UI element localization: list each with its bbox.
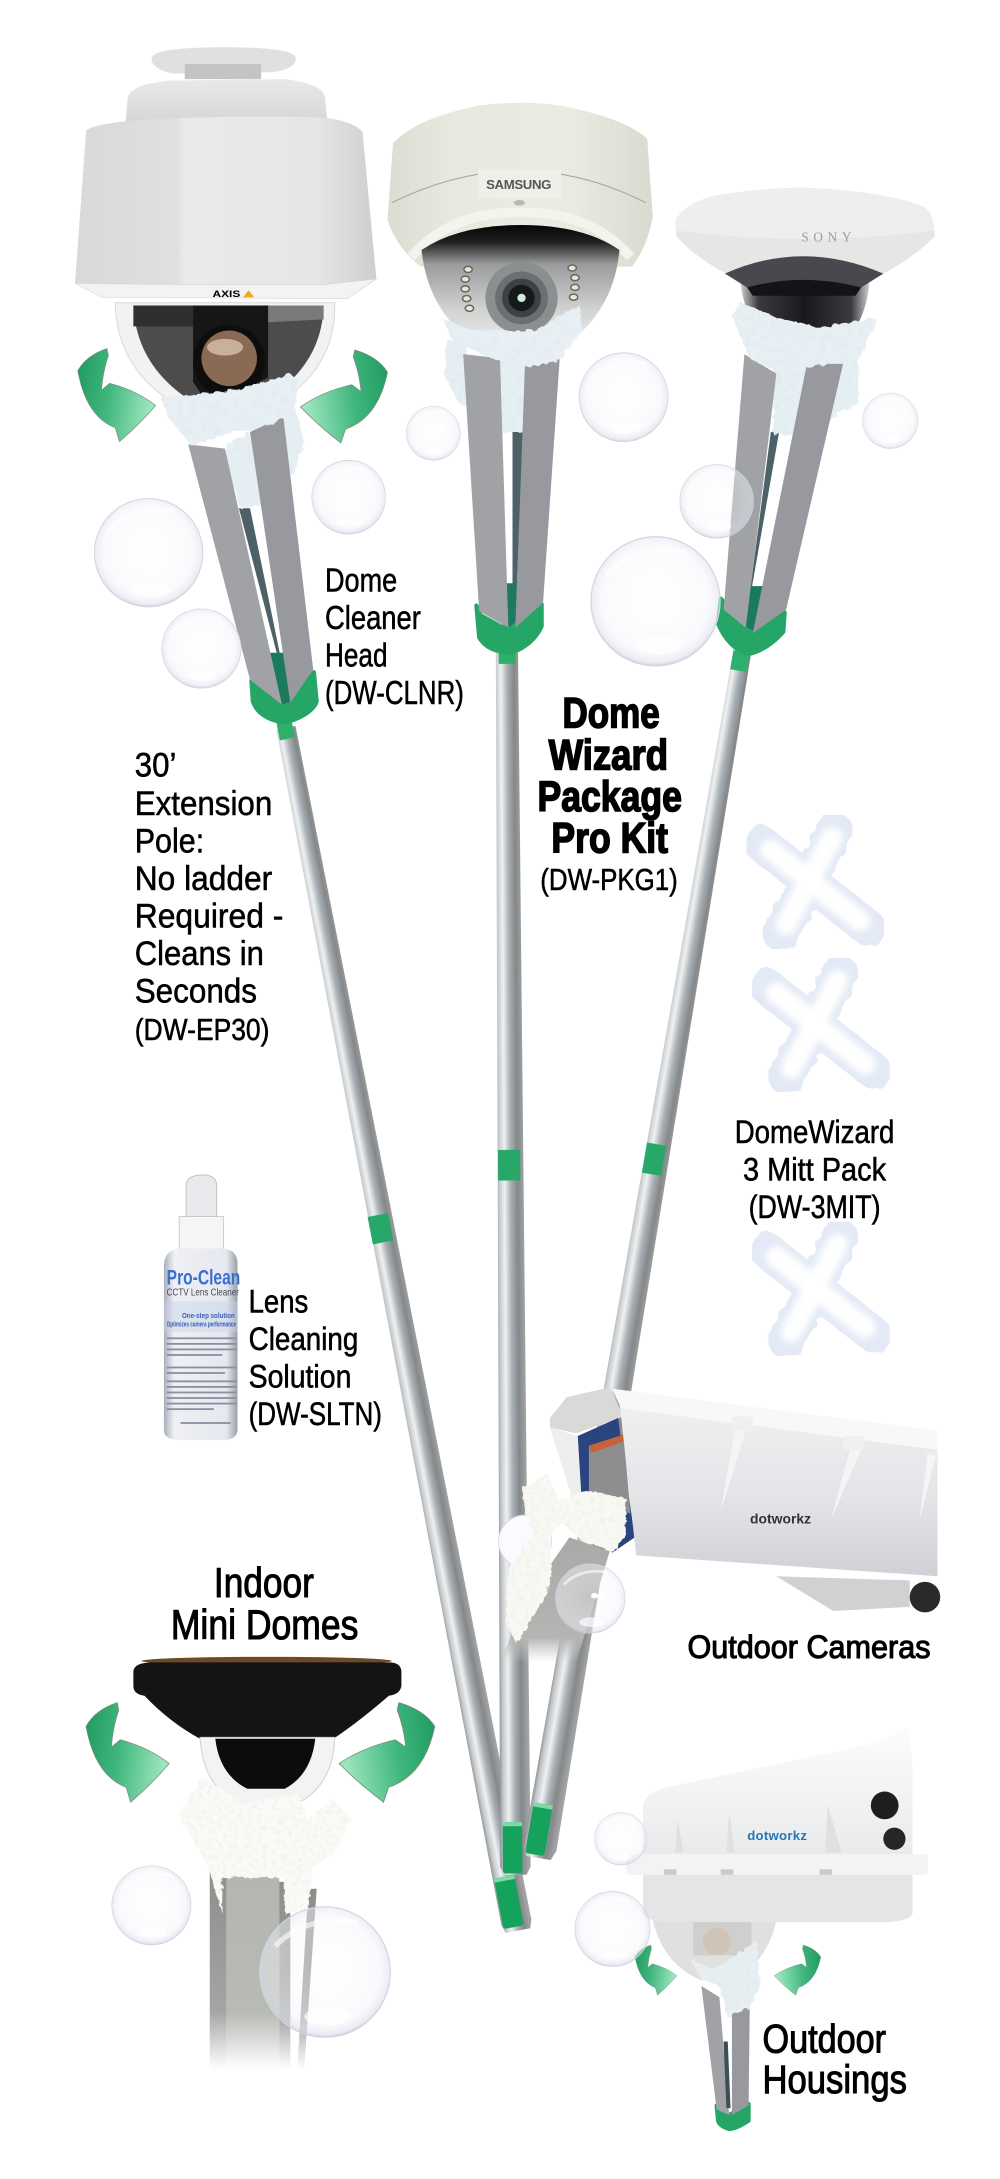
mitt band xyxy=(732,303,876,372)
collar xyxy=(476,604,542,653)
dome cleaner head 2 with mitt and collar xyxy=(442,305,582,653)
label: 30' Extension Pole: No ladder xyxy=(135,860,272,898)
collar xyxy=(718,599,785,654)
Sony dome camera xyxy=(675,187,935,331)
label: Outdoor Housings xyxy=(762,2017,907,2102)
dome cleaner head 1 with mitt and collar xyxy=(161,374,317,722)
label: Outdoor Cameras: Outdoor Cameras xyxy=(687,1629,931,1665)
AXIS logo text: AXIS xyxy=(213,289,240,299)
label: Dome Cleaner Head: (DW-CLNR) xyxy=(325,675,464,712)
lens cleaning solution bottle: Optimizes camera performance xyxy=(167,1321,236,1328)
label: DomeWizard 3 Mitt Pack: (DW-3MIT) xyxy=(749,1189,881,1225)
rotation arrow, housing left xyxy=(635,1945,677,1995)
lens cleaning solution bottle xyxy=(164,1175,240,1440)
mitt 1 xyxy=(762,830,868,933)
bottle label text: Pro-Clean xyxy=(167,1267,240,1290)
indoor mount arms and mitt xyxy=(178,1778,351,2069)
label: Lens Cleaning Solution: Solution xyxy=(249,1358,351,1394)
title: Dome Wizard Package Pro Kit: (DW-PKG1) xyxy=(540,863,678,897)
label: Lens Cleaning Solution: Cleaning xyxy=(249,1321,358,1357)
mitt xyxy=(178,1778,351,1914)
label: Dome Cleaner Head xyxy=(325,563,464,712)
label: 30' Extension Pole: Seconds xyxy=(135,973,257,1011)
label: Indoor Mini Domes: Indoor xyxy=(214,1559,314,1606)
rotation arrows, top camera left xyxy=(78,349,156,442)
extension pole 2 (center) xyxy=(492,644,531,1875)
label: Indoor Mini Domes xyxy=(171,1559,358,1648)
extension pole 3 (right) xyxy=(522,649,759,1861)
mitt band xyxy=(442,305,582,368)
label: Indoor Mini Domes: Mini Domes xyxy=(171,1601,358,1648)
mount xyxy=(776,1576,910,1611)
label: 30' Extension Pole: (DW-EP30) xyxy=(135,1013,269,1047)
mitt on outdoor camera with shadow xyxy=(500,1473,626,1662)
outdoor housing with dome xyxy=(626,1728,928,1980)
outdoor housing cleaner head xyxy=(690,1942,760,2129)
rotation arrows, top camera right xyxy=(300,350,387,443)
main enclosure xyxy=(618,1394,937,1576)
collar xyxy=(251,672,317,722)
label: Lens Cleaning Solution: Lens xyxy=(249,1283,308,1319)
mitt xyxy=(690,1942,760,2018)
bubble behind outdoor camera mitt xyxy=(499,1515,551,1568)
label: 30' Extension Pole xyxy=(135,746,283,1047)
label: 30' Extension Pole: 30’ xyxy=(135,746,176,784)
rotation arrow, mini dome left xyxy=(86,1703,169,1802)
rotation arrow, housing right xyxy=(774,1945,821,1995)
blue front frame xyxy=(578,1418,635,1553)
label: 30' Extension Pole: Pole: xyxy=(135,823,204,861)
dotworkz logo text: dotworkz xyxy=(750,1510,811,1526)
label: Lens Cleaning Solution xyxy=(249,1283,382,1432)
title: Dome Wizard Package Pro Kit xyxy=(537,690,682,897)
label: Dome Cleaner Head: Cleaner xyxy=(325,600,421,637)
dotworkz logo text: dotworkz xyxy=(747,1828,807,1843)
label: 30' Extension Pole: Cleans in xyxy=(135,935,264,973)
soap bubbles xyxy=(94,353,918,2037)
mitt 3 xyxy=(768,1237,874,1340)
indoor mini dome camera xyxy=(133,1657,401,1803)
label: Lens Cleaning Solution: (DW-SLTN) xyxy=(249,1396,382,1432)
outdoor camera housing xyxy=(550,1387,940,1612)
label: Outdoor Housings: Outdoor xyxy=(762,2017,886,2062)
lens cleaning solution bottle: CCTV Lens Cleaner xyxy=(167,1288,239,1299)
title: Dome Wizard Package Pro Kit: Dome xyxy=(562,690,660,738)
sun shield xyxy=(550,1387,624,1433)
mitt band xyxy=(161,374,299,446)
title: Dome Wizard Package Pro Kit: Package xyxy=(537,773,682,821)
collar xyxy=(717,2104,749,2129)
label: Outdoor Housings: Housings xyxy=(762,2057,907,2102)
Samsung logo text: SAMSUNG xyxy=(486,177,551,192)
dome cleaner head 3 with mitt and collar xyxy=(718,303,876,654)
rotation arrow, mini dome right xyxy=(339,1703,435,1802)
label: Dome Cleaner Head: Head xyxy=(325,638,388,675)
Sony logo text: SONY xyxy=(801,230,852,245)
label: Dome Cleaner Head: Dome xyxy=(325,563,397,600)
title: Dome Wizard Package Pro Kit: Pro Kit xyxy=(551,815,668,863)
extension pole 1 (left) xyxy=(269,714,533,1933)
Samsung dome camera xyxy=(388,103,653,347)
mitt 2 xyxy=(768,974,874,1076)
label: 30' Extension Pole: Required - xyxy=(135,898,283,936)
label: DomeWizard 3 Mitt Pack: DomeWizard xyxy=(735,1114,894,1150)
lens cleaning solution bottle: One-step solution xyxy=(182,1313,235,1320)
AXIS dome camera xyxy=(75,47,376,399)
title: Dome Wizard Package Pro Kit: Wizard xyxy=(549,731,668,779)
label: DomeWizard 3 Mitt Pack xyxy=(735,1114,894,1225)
label: DomeWizard 3 Mitt Pack: 3 Mitt Pack xyxy=(743,1151,887,1187)
label: 30' Extension Pole: Extension xyxy=(135,785,272,823)
